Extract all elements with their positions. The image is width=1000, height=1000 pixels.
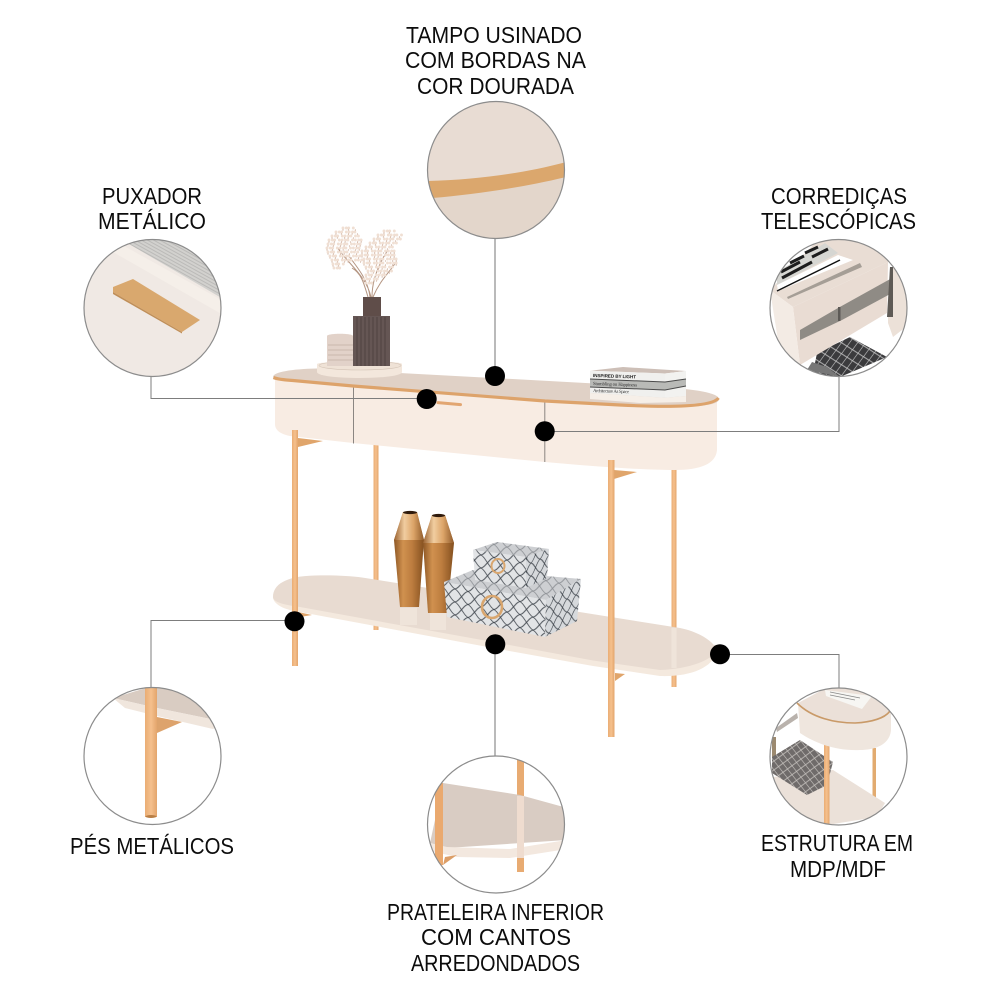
label: structure: MDP/MDF — [790, 856, 886, 882]
books: Stumbling on Happiness — [593, 382, 637, 389]
infographic canvas — [72, 27, 916, 971]
drawer body — [275, 378, 717, 470]
label: tabletop: COR DOURADA — [417, 73, 575, 99]
slide rail — [800, 278, 892, 340]
label: handle: PUXADOR — [102, 183, 202, 209]
console table — [273, 228, 719, 737]
rug below drawer — [807, 337, 887, 377]
back legs — [374, 445, 676, 687]
drawer handle — [438, 403, 460, 405]
label: tabletop: TAMPO USINADO — [406, 22, 582, 48]
label: slides: CORREDIÇAS — [771, 183, 907, 209]
book inside drawer — [777, 243, 853, 291]
drawer seams — [354, 387, 545, 462]
label: lower shelf: ARREDONDADOS — [411, 950, 580, 976]
label: tabletop: COM BORDAS NA — [405, 47, 587, 73]
flowers — [327, 228, 402, 297]
label: slides — [761, 183, 916, 234]
lower brackets — [298, 612, 625, 681]
decorative tray, cup, vase and flowers — [317, 228, 402, 378]
label: lower shelf — [387, 899, 604, 976]
label: structure — [761, 830, 913, 882]
books: INSPIRED BY LIGHT — [593, 373, 636, 380]
label: feet: PÉS METÁLICOS — [70, 833, 234, 859]
lower shelf edge — [273, 597, 717, 676]
tabletop gold edge — [274, 378, 718, 406]
drawer and top — [798, 704, 891, 750]
gold vases — [394, 511, 454, 613]
leader lines — [151, 238, 839, 756]
detail circle: lower shelf corner — [426, 755, 566, 894]
drawer rim and cabinet — [772, 240, 888, 307]
lower shelf surface — [273, 575, 717, 670]
shelf — [773, 770, 885, 825]
label: handle: METÁLICO — [98, 208, 206, 234]
vase — [353, 297, 390, 366]
top brackets — [298, 438, 637, 479]
label: lower shelf: PRATELEIRA INFERIOR — [387, 899, 604, 925]
detail circle: metal feet — [83, 686, 222, 826]
label: tabletop — [405, 22, 587, 99]
patterned boxes — [444, 542, 581, 637]
detail circle: metal handle — [83, 238, 222, 378]
label: handle — [98, 183, 206, 234]
books — [590, 367, 686, 403]
books: Architecture As Space — [593, 389, 629, 395]
anchor dots — [284, 366, 730, 664]
tray — [317, 361, 402, 378]
detail circle: MDP/MDF structure — [769, 687, 908, 826]
detail circle: tabletop edge — [426, 100, 566, 240]
shelf reflections — [400, 608, 676, 668]
label: slides: TELESCÓPICAS — [761, 208, 916, 234]
cup — [327, 334, 353, 366]
label: lower shelf: COM CANTOS — [421, 924, 571, 950]
boxes — [772, 740, 833, 795]
tabletop surface — [273, 368, 719, 406]
label: structure: ESTRUTURA EM — [761, 830, 913, 856]
detail circle: telescopic slides — [769, 238, 908, 378]
front legs — [292, 430, 614, 737]
